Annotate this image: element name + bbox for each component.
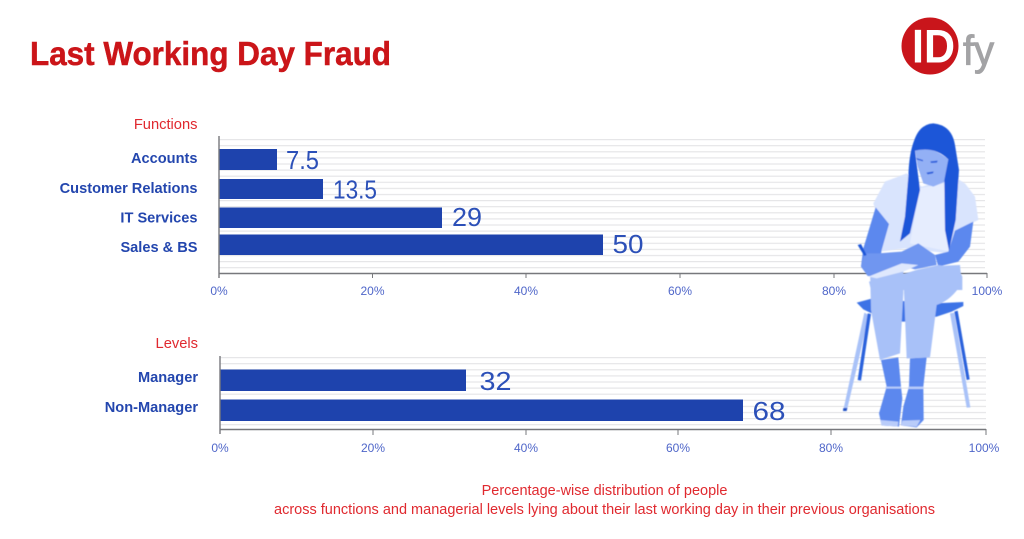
category labels: functions: IT Services bbox=[120, 210, 198, 226]
hair bbox=[900, 123, 959, 251]
logo: IDfy bbox=[902, 18, 994, 74]
heading: functions: Functions bbox=[134, 117, 198, 133]
axis labels: functions: 20% bbox=[360, 284, 385, 298]
arms bbox=[861, 207, 973, 275]
logo: IDfy: fy bbox=[963, 27, 994, 74]
axis: functions bbox=[219, 136, 987, 278]
value labels: levels: 32 bbox=[480, 366, 512, 396]
logo: IDfy: ID bbox=[912, 20, 955, 72]
trousers bbox=[870, 265, 962, 360]
value labels: functions: 7.5 bbox=[286, 145, 319, 175]
category labels: functions: Customer Relations bbox=[60, 181, 198, 197]
value labels: functions: 29 bbox=[452, 202, 482, 232]
category labels: functions: Accounts bbox=[131, 151, 198, 167]
axis: levels bbox=[220, 356, 986, 435]
axis labels: functions: 60% bbox=[668, 284, 692, 298]
bars: functions bbox=[219, 149, 603, 255]
axis labels: levels: 40% bbox=[514, 441, 538, 455]
value labels: levels: 68 bbox=[752, 396, 786, 426]
heading: levels: Levels bbox=[156, 336, 198, 352]
bars: levels bbox=[220, 370, 743, 421]
value labels: levels bbox=[480, 366, 786, 426]
chart: levels bbox=[105, 336, 1000, 455]
value labels: functions bbox=[286, 145, 644, 259]
axis labels: levels: 20% bbox=[361, 441, 385, 455]
axis labels: levels: 100% bbox=[969, 441, 1000, 455]
axis labels: functions: 0% bbox=[210, 284, 228, 298]
category labels: levels: Non-Manager bbox=[105, 400, 198, 416]
chair and lower body bbox=[843, 265, 970, 427]
axis labels: functions: 100% bbox=[972, 284, 1003, 298]
category labels: levels: Manager bbox=[138, 370, 198, 386]
neck and face bbox=[915, 149, 949, 187]
shins and sandals bbox=[879, 357, 927, 427]
category labels: levels bbox=[105, 370, 198, 416]
axis labels: functions bbox=[210, 284, 1003, 298]
axis labels: levels: 60% bbox=[666, 441, 690, 455]
notebook and hands bbox=[861, 243, 937, 277]
thighs bbox=[869, 265, 962, 290]
axis labels: levels bbox=[211, 441, 1000, 455]
value labels: functions: 13.5 bbox=[333, 174, 377, 204]
footnote bbox=[274, 483, 935, 518]
blouse bbox=[873, 173, 978, 253]
value labels: functions: 50 bbox=[612, 229, 644, 259]
axis labels: functions: 80% bbox=[822, 284, 846, 298]
axis labels: levels: 80% bbox=[819, 441, 843, 455]
footnote: Percentage-wise distribution of people bbox=[482, 483, 727, 499]
chair seat bbox=[857, 299, 963, 322]
illustration: seated woman writing bbox=[843, 123, 978, 427]
eyes and mouth bbox=[916, 158, 938, 174]
category labels: functions: Sales & BS bbox=[120, 240, 198, 256]
chart: functions bbox=[60, 117, 1003, 298]
axis labels: levels: 0% bbox=[211, 441, 229, 455]
chair legs bbox=[843, 311, 970, 411]
category labels: functions bbox=[60, 151, 198, 256]
upper body bbox=[858, 123, 978, 290]
footnote: across functions and managerial levels lying about their last working day in their previous organisations bbox=[274, 502, 935, 518]
axis labels: functions: 40% bbox=[514, 284, 538, 298]
title: Last Working Day Fraud bbox=[30, 35, 391, 72]
